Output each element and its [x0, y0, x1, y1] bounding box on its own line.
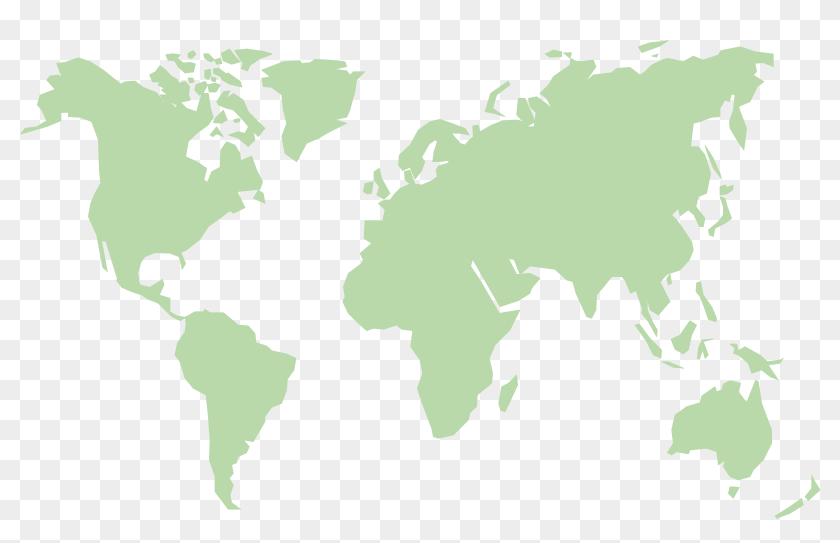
British Isles [374, 168, 390, 199]
India and Southeast Asia [560, 253, 688, 337]
New Guinea [730, 344, 783, 380]
Sulawesi [697, 339, 713, 359]
New Zealand [805, 475, 820, 501]
North America [21, 49, 272, 321]
Arctic islands [150, 49, 272, 105]
Japan [720, 185, 733, 195]
mainland North America [21, 58, 265, 288]
Madagascar [499, 375, 518, 412]
Africa [343, 260, 520, 438]
Sumatra [635, 324, 662, 358]
South America [175, 309, 296, 509]
Indonesia, Philippines and Oceania [635, 282, 820, 518]
Borneo [671, 321, 697, 354]
Australia [667, 380, 772, 480]
Tasmania [728, 487, 739, 498]
Novaya Zemlya [485, 81, 510, 117]
Java [662, 362, 684, 368]
Eurasian mainland [360, 41, 773, 307]
Greenland [262, 59, 365, 162]
Philippines [696, 282, 717, 322]
Sakhalin [705, 145, 722, 179]
Mexico and Central America [113, 260, 187, 321]
Eurasia [360, 41, 773, 337]
Svalbard and northern islands [545, 50, 562, 57]
